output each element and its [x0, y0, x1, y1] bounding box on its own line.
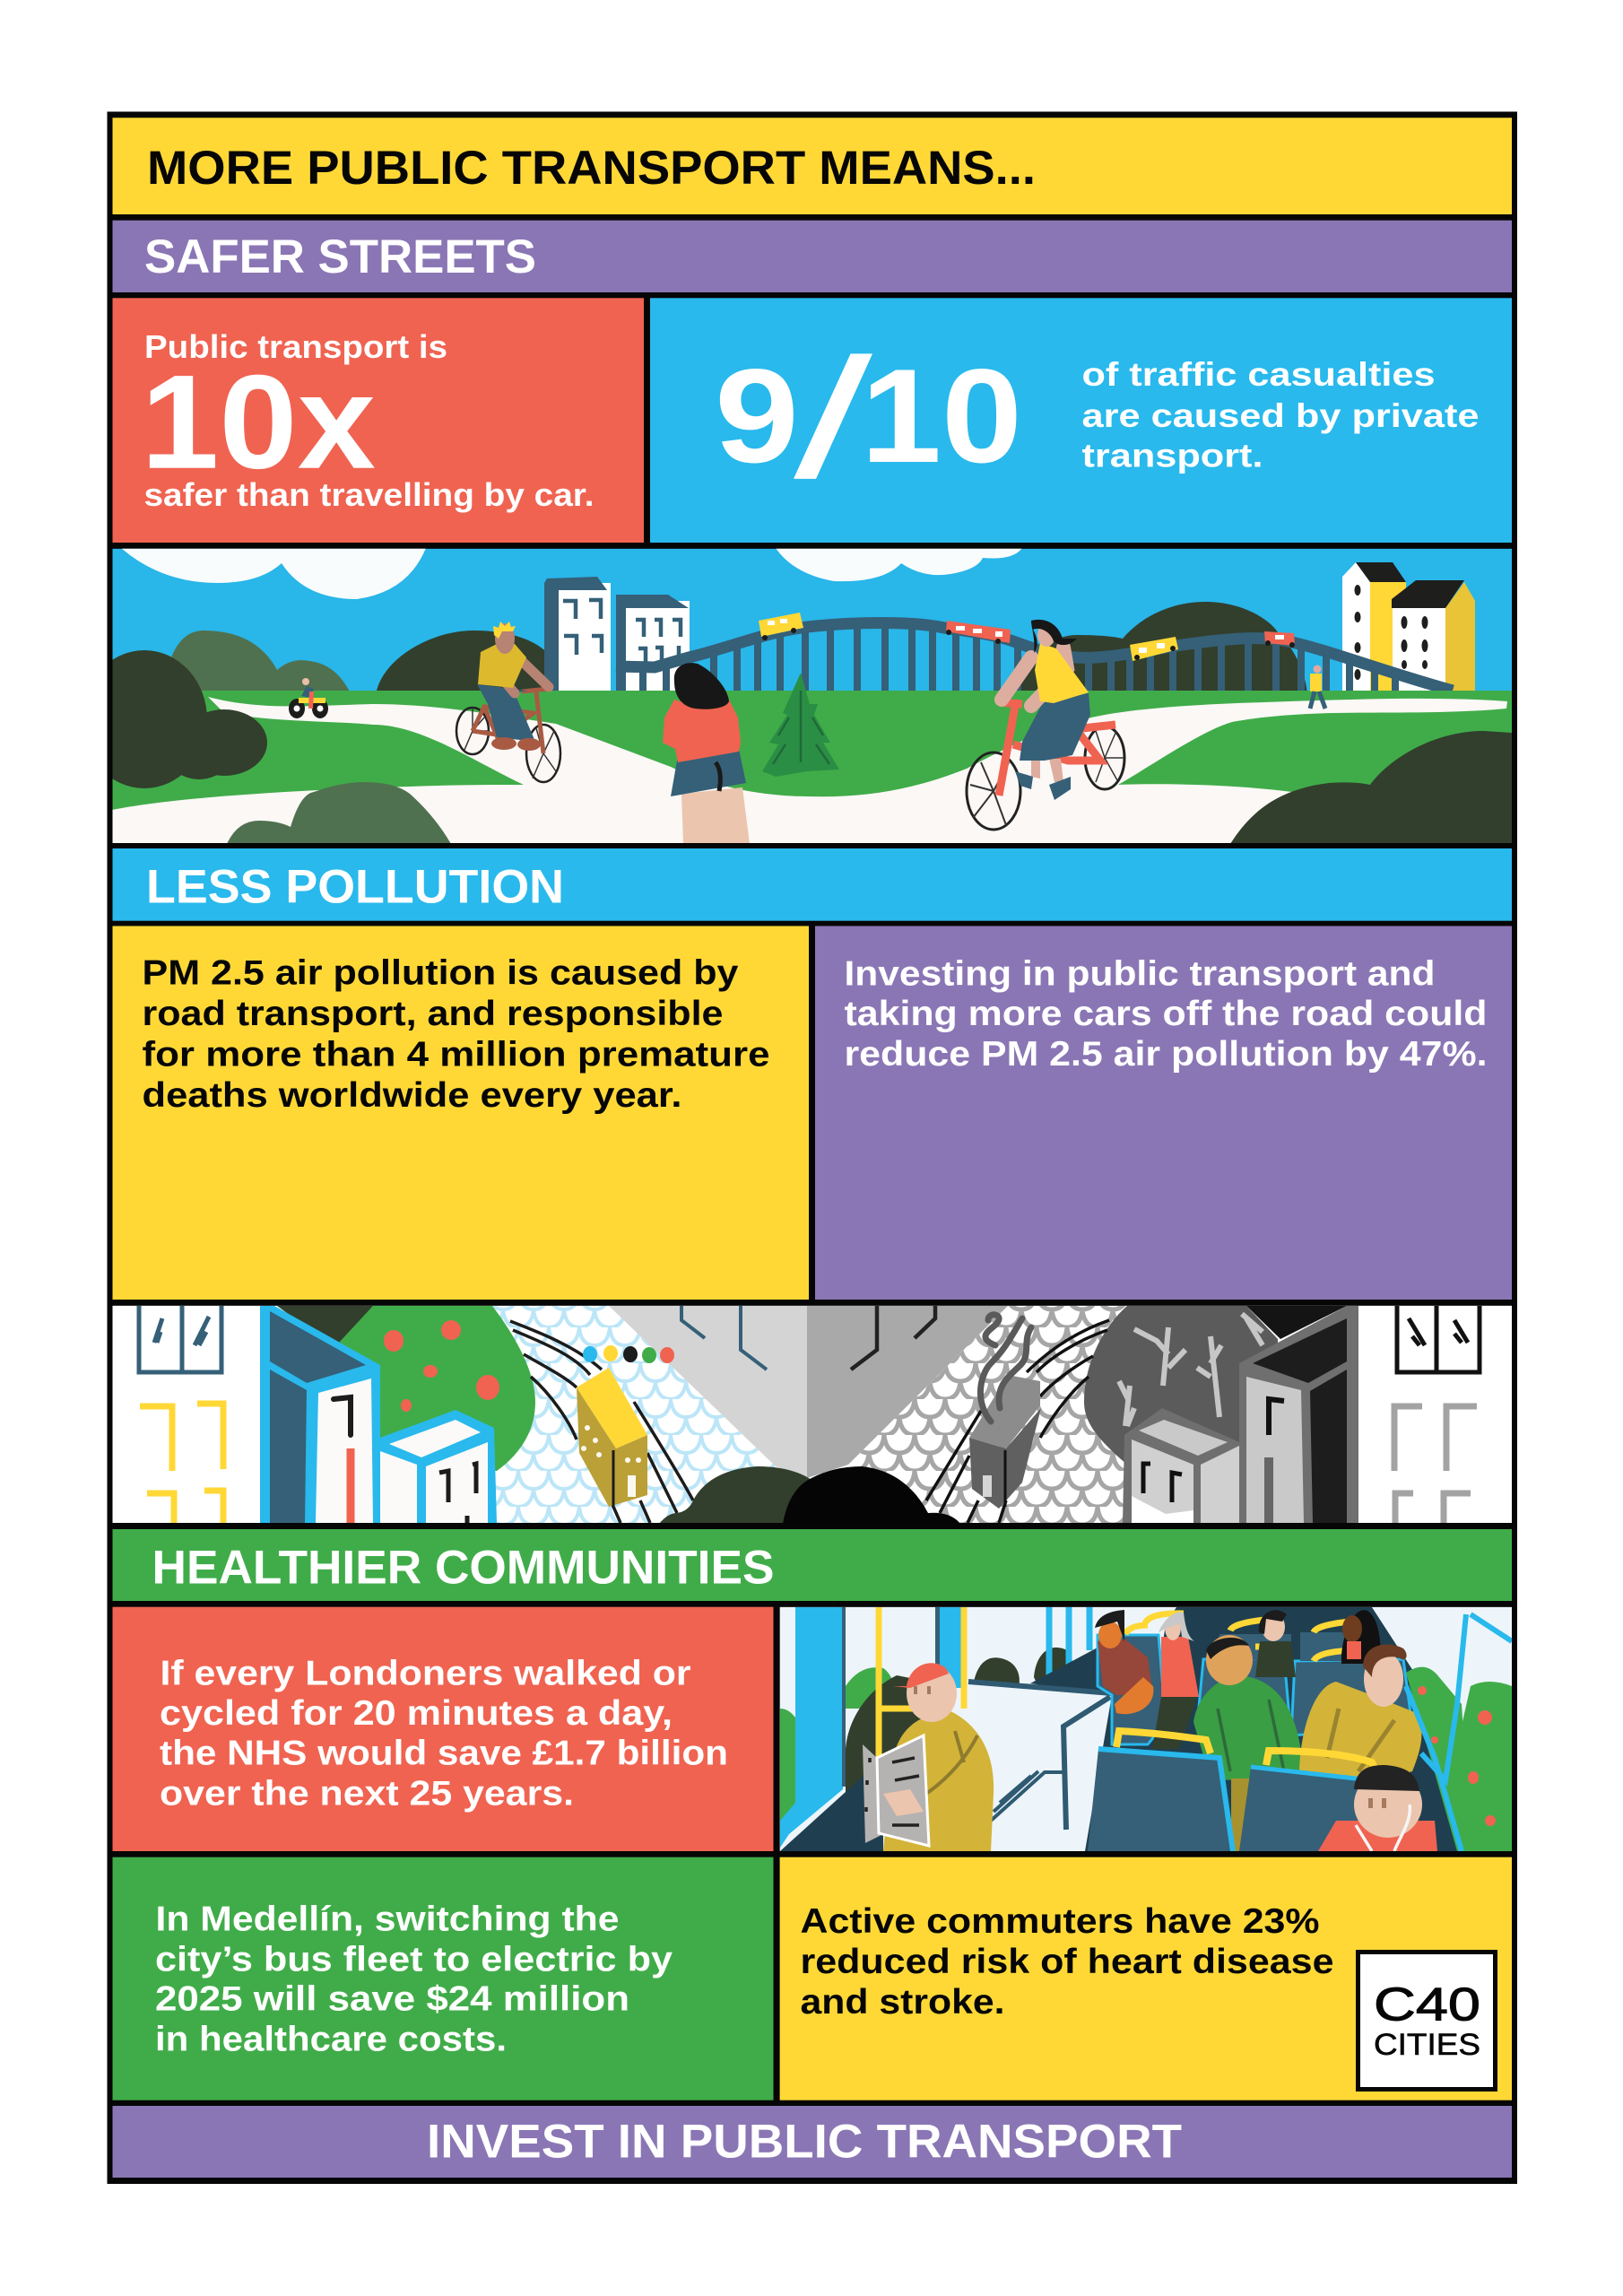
panel text — [155, 1900, 673, 2059]
fir tree — [762, 673, 839, 777]
casualties text — [1081, 356, 1480, 474]
outer black frame — [108, 111, 1517, 2184]
panel text: reduced risk of heart disease — [800, 1943, 1334, 1981]
casualties text: are caused by private — [1081, 397, 1480, 434]
passenger in mustard — [1299, 1645, 1421, 1780]
panel text: Investing in public transport and — [845, 954, 1435, 993]
bus interior dark rear — [1030, 1607, 1475, 1851]
dark bus floor — [780, 1758, 883, 1851]
title: MORE PUBLIC TRANSPORT MEANS... — [147, 142, 1036, 195]
passenger in green — [1193, 1635, 1302, 1851]
panel text — [160, 1654, 728, 1813]
right window — [1397, 1306, 1480, 1372]
title banner — [113, 117, 1512, 214]
grey small building — [1123, 1408, 1239, 1523]
front bus seats — [1088, 1731, 1376, 1851]
heading text: LESS POLLUTION — [146, 861, 564, 914]
panel text — [800, 1902, 1334, 2022]
C40 Cities logo: CITIES — [1374, 2028, 1480, 2062]
panel text: reduce PM 2.5 air pollution by 47%. — [845, 1035, 1487, 1074]
panel text: road transport, and responsible — [142, 995, 723, 1033]
panel: 10x safer — [113, 298, 644, 543]
illustration: passengers on a bus — [780, 1607, 1512, 1851]
big number 9/10: 9 — [715, 341, 799, 491]
woman standing with back turned — [663, 663, 750, 844]
heading text: SAFER STREETS — [144, 230, 536, 283]
section heading: less pollution — [113, 848, 1512, 921]
green ground — [113, 691, 1512, 810]
woman cyclist — [967, 620, 1124, 830]
panel text: deaths worldwide every year. — [142, 1076, 681, 1115]
blue small building — [380, 1410, 497, 1523]
yellow and white houses — [1342, 562, 1475, 695]
panel text — [142, 954, 769, 1115]
blue window pillars — [780, 1607, 1089, 1848]
yellow window marks — [140, 1404, 223, 1523]
green tree with red fruit — [339, 1306, 535, 1471]
big number 9/10 — [715, 324, 1022, 514]
grey polluting bus — [969, 1375, 1041, 1509]
child in beanie with earphones — [1318, 1765, 1437, 1851]
left window — [139, 1306, 221, 1372]
panel: 9/10 casualties — [650, 298, 1512, 543]
banner text: INVEST IN PUBLIC TRANSPORT — [427, 2116, 1182, 2169]
yellow rear seat handles — [1125, 1613, 1363, 1661]
yellow grab poles — [879, 1607, 964, 1851]
panel text: in healthcare costs. — [155, 2021, 507, 2059]
background hills — [162, 602, 1307, 695]
dark bushes outside — [846, 1648, 1076, 1794]
panel text: the NHS would save £1.7 billion — [160, 1735, 728, 1773]
section heading: healthier communities — [113, 1529, 1512, 1601]
train tracks right — [926, 1320, 1109, 1523]
buildings left — [544, 577, 690, 691]
closing banner — [113, 2106, 1512, 2178]
big number 9/10: / — [794, 324, 872, 514]
green trees outside — [780, 1667, 897, 1830]
panel text: 2025 will save $24 million — [155, 1980, 629, 2019]
panel: Medellin electric buses — [113, 1857, 773, 2100]
cyclist man in yellow — [456, 622, 560, 782]
grey wedges — [609, 1306, 1008, 1478]
white paths — [112, 697, 1512, 843]
C40 Cities logo — [1358, 1952, 1496, 2090]
panel text: Active commuters have 23% — [800, 1902, 1320, 1941]
heading text: HEALTHIER COMMUNITIES — [152, 1542, 775, 1595]
clouds — [121, 548, 1022, 599]
big number 10x: 10x — [141, 347, 376, 497]
panel: Londoners walking — [113, 1607, 773, 1851]
blue tall building — [260, 1306, 380, 1523]
panel: active commuters — [780, 1857, 1512, 2100]
intro text: Public transport is — [144, 328, 447, 365]
panel text: cycled for 20 minutes a day, — [160, 1694, 673, 1733]
olive bush bottom — [227, 782, 451, 844]
exhaust smoke — [980, 1315, 1031, 1422]
panel text: taking more cars off the road could — [845, 995, 1487, 1033]
closing text: safer than travelling by car. — [143, 476, 594, 513]
train tracks left — [510, 1321, 693, 1523]
panel text: and stroke. — [800, 1983, 1004, 2022]
grey scale pattern roadway — [848, 1306, 1130, 1523]
rear passengers — [1095, 1610, 1381, 1749]
yellow clean bus — [577, 1368, 647, 1507]
small walker — [1310, 665, 1325, 709]
blue scale pattern roadway — [484, 1306, 776, 1523]
panel text: If every Londoners walked or — [160, 1654, 691, 1692]
panel text: In Medellín, switching the — [156, 1900, 619, 1938]
panel text: for more than 4 million premature — [142, 1035, 769, 1074]
panel: investing reduces pollution — [815, 926, 1512, 1300]
casualties text: transport. — [1081, 438, 1263, 474]
dark bushes bottom right — [1230, 731, 1512, 844]
section heading: safer streets — [113, 221, 1512, 292]
grey window marks — [1394, 1406, 1477, 1523]
panel: PM 2.5 premature deaths — [113, 926, 809, 1300]
dark green bush centre — [659, 1466, 812, 1524]
panel text: over the next 25 years. — [160, 1775, 574, 1813]
black sky behind grey building — [1246, 1306, 1347, 1339]
man reading newspaper — [863, 1663, 994, 1851]
panel text — [845, 954, 1487, 1074]
buses on viaduct — [759, 613, 1295, 661]
rear seats — [1098, 1632, 1412, 1744]
grey big building — [1239, 1306, 1358, 1523]
illustration: cycling park scene — [82, 548, 1512, 844]
white partition — [968, 1682, 1112, 1851]
panel text: city’s bus fleet to electric by — [155, 1940, 673, 1979]
illustration: clean versus polluted street — [113, 1306, 1512, 1524]
dark hill behind left building — [277, 1306, 373, 1345]
coloured dots — [583, 1345, 674, 1363]
dark bushes left — [113, 650, 267, 788]
blue bus frame right — [1406, 1614, 1512, 1851]
casualties text: of traffic casualties — [1081, 356, 1435, 393]
panel text: PM 2.5 air pollution is caused by — [142, 954, 739, 993]
C40 Cities logo: C40 — [1374, 1979, 1480, 2031]
green trees right — [1406, 1667, 1512, 1851]
elevated viaduct — [616, 622, 1453, 695]
grey tree with bare branches — [1084, 1306, 1278, 1471]
small distant cyclist — [289, 678, 328, 718]
big number 9/10: 10 — [861, 341, 1022, 491]
black bush centre — [783, 1466, 960, 1524]
